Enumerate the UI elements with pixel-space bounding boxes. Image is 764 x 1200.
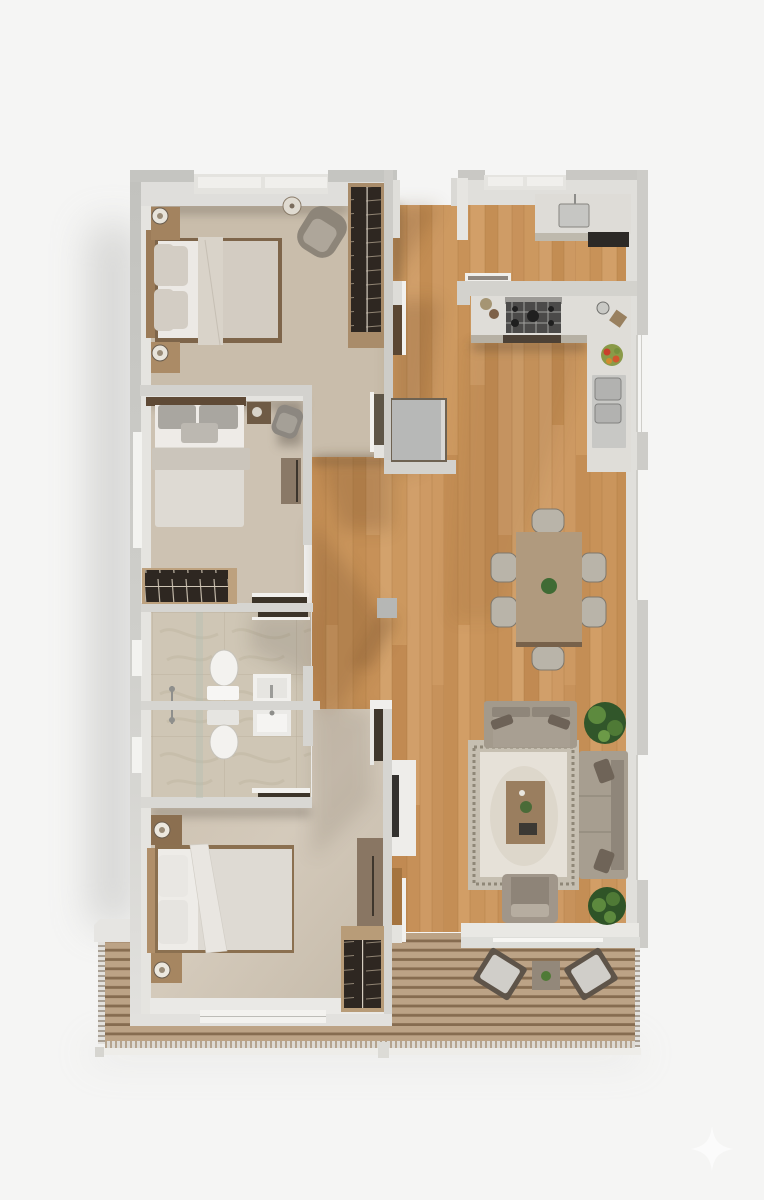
floor: bedroom 3 carpet: [150, 709, 388, 1002]
coffee table: [506, 781, 545, 844]
wall bedroom 2 / bath: [141, 603, 313, 612]
wall bedroom 1 / bedroom 2: [140, 385, 312, 396]
bedroom 3 door: [370, 700, 392, 765]
bottom wall of bath: [141, 797, 312, 808]
stub wall by kitchen: [451, 178, 468, 240]
kitchen l-shaped counter: [471, 296, 631, 472]
wall bath right: [303, 666, 313, 746]
double sink: [592, 375, 626, 448]
right window frames: [636, 335, 642, 880]
left wall inner face: [141, 182, 151, 1022]
floor: bathroom stone: [150, 612, 311, 800]
deck railing: [95, 942, 641, 1058]
tv bench bedroom 2: [281, 458, 301, 504]
kitchen divider wall: [457, 281, 637, 305]
bed 1: [146, 230, 282, 345]
fruit bowl: [601, 344, 623, 366]
left wall rim: [130, 170, 141, 1026]
right wall windows: [637, 335, 648, 880]
right wall inner face: [626, 180, 637, 948]
living lower wall: [461, 923, 640, 948]
sparkle watermark: [691, 1126, 733, 1171]
table plant: [541, 578, 557, 594]
wall bedroom 2 right: [303, 385, 312, 545]
pillows: [154, 244, 188, 331]
nightstands bedroom 3: [151, 815, 182, 983]
toilet bottom: [207, 710, 239, 759]
right wall rim: [637, 170, 648, 948]
bath top door: [252, 593, 310, 620]
bath bottom door: [252, 788, 310, 797]
wall shadows: [150, 205, 587, 816]
bottom wall: [150, 998, 384, 1014]
wall right of bedroom 1: [384, 170, 393, 470]
closet bedroom 2: [142, 568, 237, 604]
lower door at deck: [392, 868, 406, 943]
plant bottom: [588, 887, 626, 925]
sofa top: [484, 701, 577, 748]
hall closet base wall: [384, 460, 456, 474]
central column: [350, 598, 397, 668]
kitchen accessories: [480, 298, 627, 328]
floors: [150, 205, 627, 1002]
hallway fridge unit: [391, 398, 447, 462]
sofa right: [579, 751, 628, 879]
building cast shadow: [90, 225, 640, 1058]
wall bedroom 3 right: [383, 700, 392, 1026]
kitchen window: [484, 175, 566, 190]
dining chairs: [491, 509, 606, 670]
armchair living room: [502, 874, 558, 923]
patio chairs and table: [472, 947, 619, 1001]
left wall windows: [132, 432, 142, 773]
diagonal sun shadows: [250, 205, 585, 860]
top wall right wing rim: [458, 170, 648, 180]
deck planks: [105, 933, 637, 1041]
top wall left wing rim: [130, 170, 397, 182]
door recess top hallway: [393, 180, 406, 355]
bedroom 1 window: [194, 174, 328, 194]
closet bedroom 3: [341, 926, 384, 1012]
armchair bedroom 1: [283, 197, 353, 263]
floor: bedroom 1 carpet: [150, 205, 392, 457]
sink bottom: [253, 710, 291, 736]
rug: [468, 740, 579, 890]
bed 3: [147, 844, 294, 953]
middle bath wall: [141, 701, 320, 710]
bottom window: [200, 1010, 326, 1023]
floor: bedroom 2 carpet: [150, 400, 304, 605]
closet bedroom 1: [348, 183, 384, 348]
kitchen pass door: [465, 273, 511, 281]
bed 2: [146, 397, 250, 527]
shower glass dividers: [196, 612, 203, 798]
sink top: [253, 674, 291, 701]
deck: [94, 919, 641, 1058]
floor: wood living area: [312, 205, 627, 932]
bedroom 1 door: [370, 392, 384, 458]
exterior and interior walls: [130, 170, 648, 1026]
nightstand and chair bedroom 2: [247, 402, 305, 441]
dining table top: [516, 532, 582, 647]
toilet top: [207, 650, 239, 700]
nightstands bedroom 1: [151, 207, 180, 373]
top wall left wing inner face: [141, 182, 388, 206]
interior shadows on floors: [150, 205, 587, 860]
desk bedroom 3: [357, 838, 383, 926]
deck left roof stub: [94, 919, 130, 942]
top wall right wing inner: [458, 180, 638, 205]
tv unit: [392, 760, 416, 856]
dining table group: [491, 509, 606, 670]
shower faucets: [169, 686, 175, 724]
plant top: [584, 702, 626, 744]
gas stove: [503, 297, 562, 343]
kitchen back counter: [535, 194, 631, 247]
